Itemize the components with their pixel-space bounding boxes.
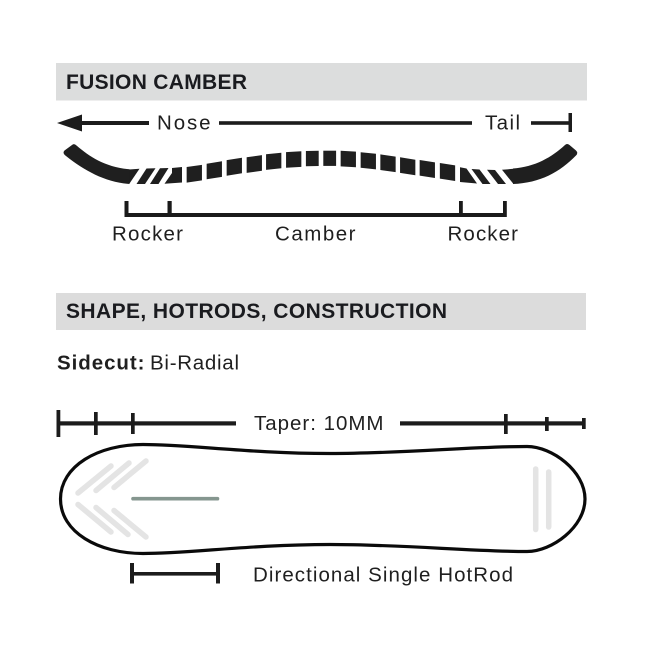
nose inserts xyxy=(78,461,146,537)
panel: section header shape hotrods construction xyxy=(56,293,586,330)
text: sidecut: Bi-Radial xyxy=(150,352,239,374)
outline xyxy=(60,444,585,554)
camber segments xyxy=(187,151,455,183)
left rocker hatch xyxy=(129,167,182,184)
text: sidecut: Sidecut: xyxy=(57,352,144,374)
text: sidecut xyxy=(57,352,239,374)
scale: taper: Taper: 10MM xyxy=(254,412,384,435)
right rocker hatch xyxy=(460,167,514,184)
tail inserts xyxy=(536,469,549,530)
label: right rocker: Rocker xyxy=(448,222,518,246)
panel: section header fusion camber: FUSION CAMBER xyxy=(66,71,247,94)
nose end of board xyxy=(64,144,130,184)
arrow: nose to tail direction: Nose xyxy=(157,112,210,134)
chart: camber profile xyxy=(64,144,577,184)
tail end of board xyxy=(513,144,577,184)
hotrod xyxy=(133,497,218,501)
arrow: nose to tail direction xyxy=(57,112,572,134)
label: camber: Camber xyxy=(275,222,356,246)
diagram: snowboard outline xyxy=(60,444,585,554)
bracket: rocker camber rocker xyxy=(124,201,507,217)
scale: taper xyxy=(56,410,586,437)
panel: section header fusion camber xyxy=(56,63,587,100)
label: hotrod: Directional Single HotRod xyxy=(253,564,513,586)
label: left rocker: Rocker xyxy=(112,222,183,246)
arrow: nose to tail direction: Tail xyxy=(485,112,520,134)
bracket: hotrod length xyxy=(130,563,220,584)
panel: section header shape hotrods construction: SHAPE, HOTRODS, CONSTRUCTION xyxy=(66,300,447,323)
